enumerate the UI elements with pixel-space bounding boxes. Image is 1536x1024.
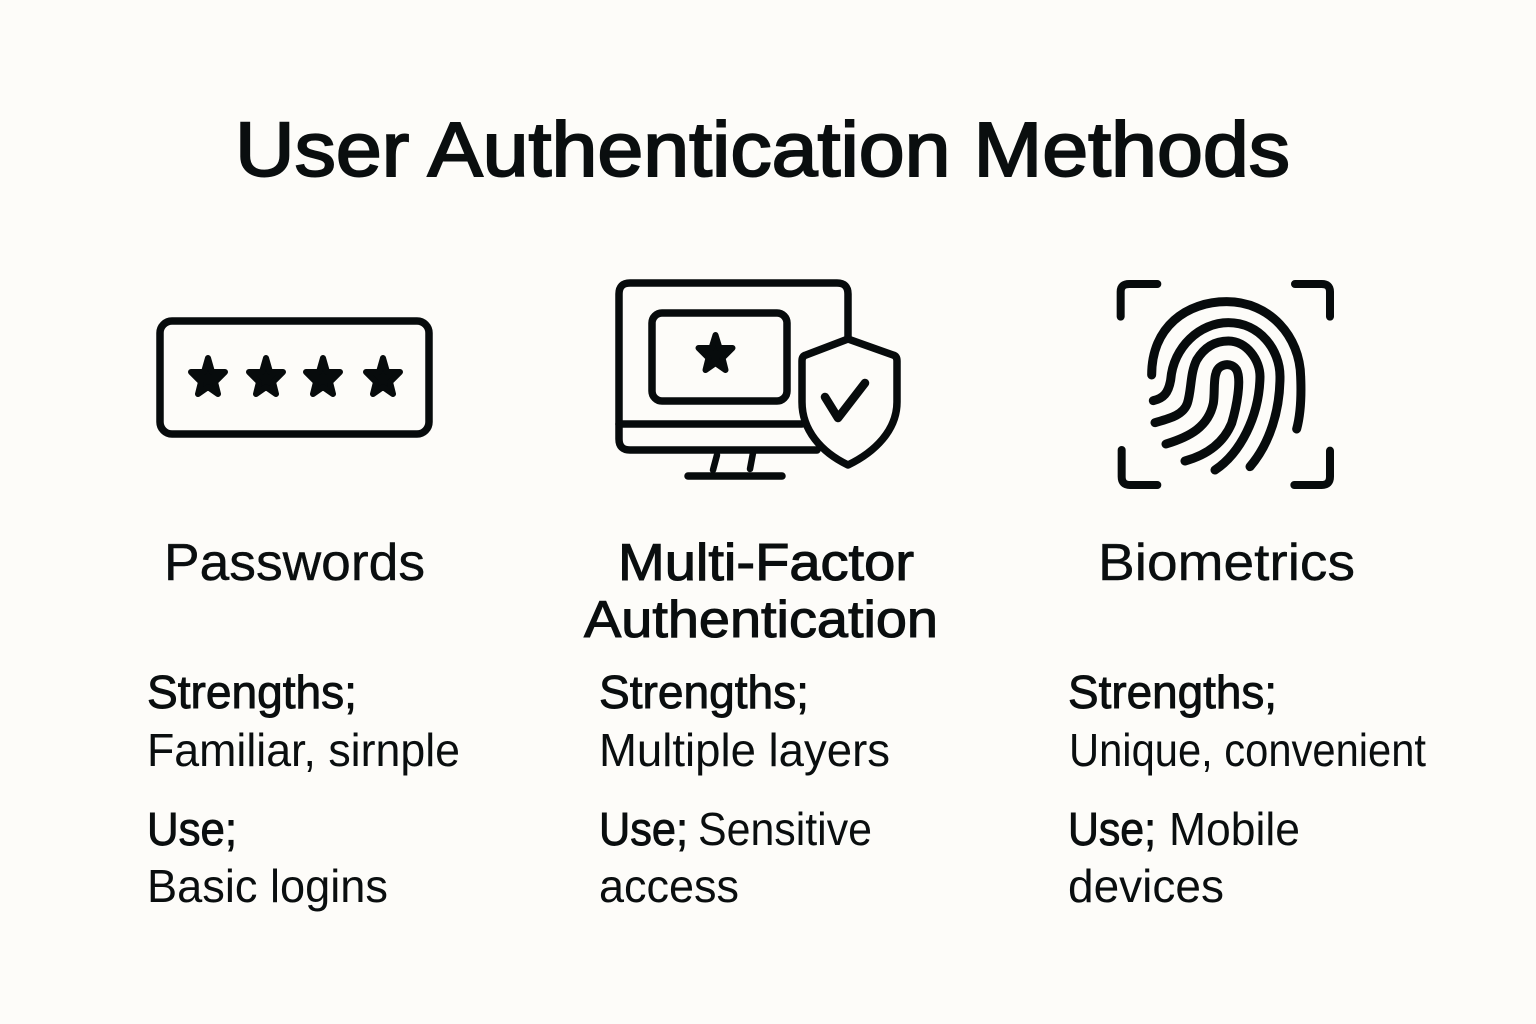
heading: multi-factor authentication: Multi-Factor [618, 534, 914, 592]
panel: multi-factor authentication [584, 283, 938, 912]
icon: password field [160, 321, 429, 434]
panel: passwords [147, 321, 460, 912]
icon: monitor with shield [619, 283, 897, 476]
heading: biometrics: Biometrics [1098, 534, 1355, 592]
panel: biometrics [1068, 284, 1426, 912]
title: User Authentication Methods [235, 107, 1290, 193]
text: biometrics use: Mobile [1169, 803, 1300, 855]
text: mfa use: Sensitive [698, 803, 872, 855]
text: biometrics use: devices [1068, 860, 1224, 912]
heading: multi-factor authentication: Authentication [584, 591, 938, 649]
text: mfa strengths [599, 666, 890, 776]
text: passwords strengths [147, 666, 460, 776]
text: mfa strengths: Strengths; [599, 666, 809, 718]
text: mfa strengths: Multiple layers [599, 724, 890, 776]
text: biometrics use: Use; [1068, 803, 1156, 855]
text: passwords strengths: Familiar, sirnple [147, 724, 460, 776]
text: mfa use [599, 803, 872, 912]
text: passwords use: Basic logins [147, 860, 388, 912]
text: passwords use [147, 803, 388, 912]
text: passwords strengths: Strengths; [147, 666, 357, 718]
text: passwords use: Use; [147, 803, 237, 855]
text: biometrics strengths [1068, 666, 1426, 776]
text: biometrics strengths: Strengths; [1068, 666, 1277, 718]
text: biometrics use [1068, 803, 1300, 912]
icon: fingerprint scan [1121, 284, 1330, 485]
heading: multi-factor authentication [584, 534, 938, 649]
text: biometrics strengths: Unique, convenient [1069, 724, 1426, 776]
text: mfa use: access [599, 860, 739, 912]
text: mfa use: Use; [599, 803, 688, 855]
heading: passwords: Passwords [164, 534, 425, 592]
